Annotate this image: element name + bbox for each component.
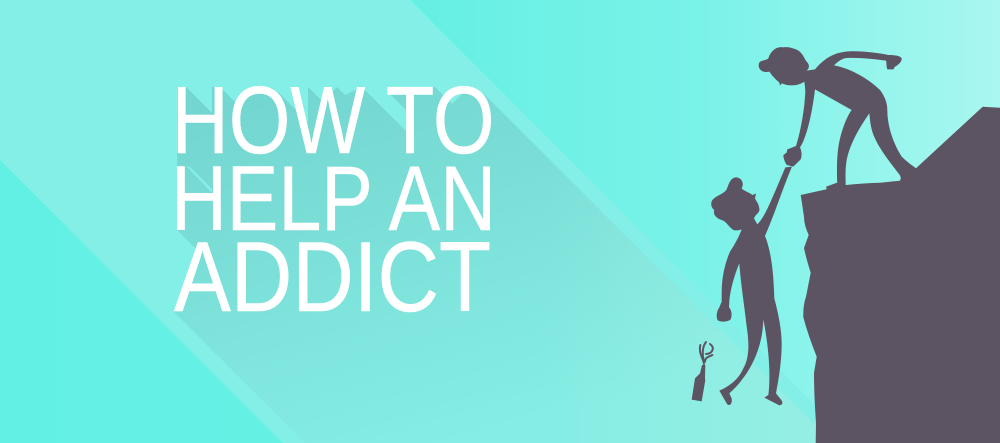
figure: helper man reaching down [759, 47, 916, 185]
long text shadow [174, 86, 833, 443]
cliff [801, 107, 1000, 443]
icon: bottle with splash [692, 342, 713, 401]
figure: falling man reaching up [711, 167, 792, 405]
title [171, 67, 496, 332]
title: ADDICT [174, 221, 491, 332]
title: HELP AN [171, 148, 496, 250]
title: HOW TO [172, 67, 494, 174]
